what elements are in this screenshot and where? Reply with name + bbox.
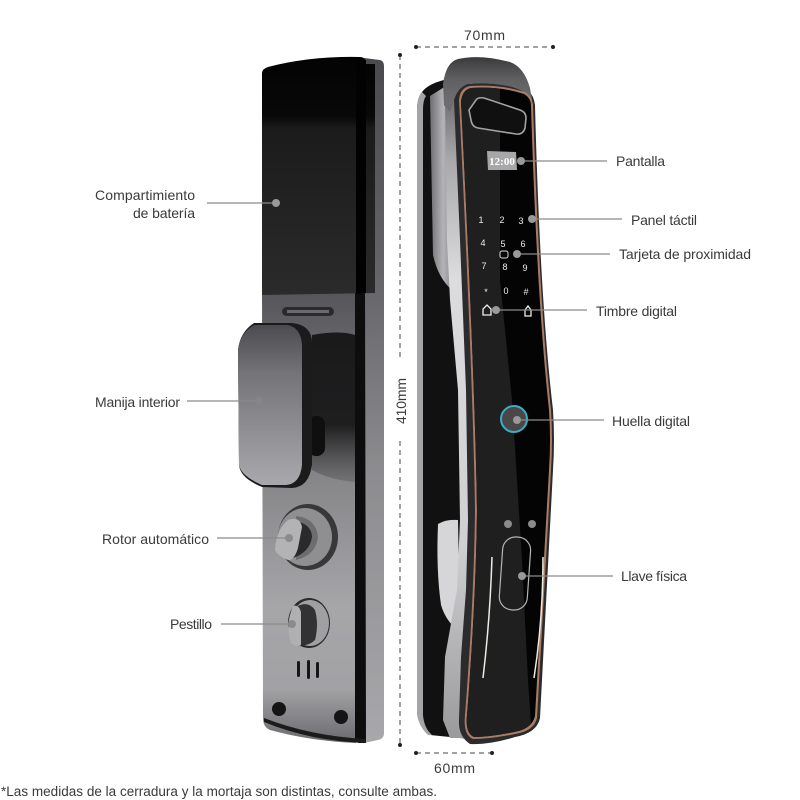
rear silver edge bbox=[417, 92, 432, 735]
callout: Timbre digital: Timbre digital bbox=[596, 303, 677, 319]
keypad: 4 bbox=[480, 238, 486, 248]
upper grey bulge bbox=[430, 86, 452, 290]
metal plate bbox=[262, 290, 356, 743]
dark centre strip bbox=[355, 290, 366, 743]
screen 12:00 bbox=[487, 151, 517, 170]
screws bbox=[272, 702, 348, 724]
callout: Compartimiento de batería: Compartimiento bbox=[95, 187, 195, 203]
callout: Rotor automático: Rotor automático bbox=[102, 531, 209, 547]
speaker slots bbox=[297, 660, 319, 679]
handle shadow bbox=[312, 332, 355, 482]
bell icons bbox=[483, 305, 531, 316]
callout: Tarjeta de proximidad: Tarjeta de proximidad bbox=[619, 246, 751, 262]
dimension: 70mm: 70mm bbox=[464, 27, 505, 43]
callout: Pestillo bbox=[170, 616, 296, 632]
back panel lock bbox=[238, 57, 384, 743]
copper outline bbox=[459, 86, 552, 739]
callout: Compartimiento de batería bbox=[95, 187, 280, 221]
keypad: 8 bbox=[502, 262, 508, 272]
card icon bbox=[500, 251, 508, 258]
face reflection bbox=[461, 88, 531, 737]
keypad: 2 bbox=[499, 215, 505, 225]
key cover bbox=[498, 536, 531, 611]
keypad: 5 bbox=[500, 239, 506, 249]
lower grey bulge bbox=[437, 520, 460, 632]
callout: Timbre digital bbox=[492, 303, 677, 319]
callout: Pestillo: Pestillo bbox=[170, 616, 212, 632]
callout: Compartimiento de batería: de batería bbox=[133, 205, 195, 221]
handle stem bbox=[308, 416, 325, 456]
keypad: 7 bbox=[481, 261, 487, 271]
battery compartment bbox=[262, 57, 375, 295]
black face bbox=[461, 88, 550, 737]
keypad: 3 bbox=[518, 216, 524, 226]
top cap bbox=[443, 57, 532, 112]
callout: Pantalla bbox=[517, 153, 665, 169]
keypad: 9 bbox=[522, 263, 528, 273]
dark frame bbox=[454, 83, 554, 744]
callout: Manija interior bbox=[95, 394, 263, 410]
dimension: 410mm bbox=[393, 53, 409, 747]
keypad: 1 bbox=[478, 215, 484, 225]
front panel lock bbox=[417, 57, 554, 745]
silver band bbox=[443, 90, 480, 738]
automatic rotor knob bbox=[275, 504, 338, 570]
fingerprint sensor bbox=[501, 406, 527, 432]
keypad: 0 bbox=[503, 286, 509, 296]
callout: Pantalla: Pantalla bbox=[616, 153, 665, 169]
callout: Huella digital bbox=[513, 413, 690, 429]
dimension: 70mm bbox=[414, 27, 555, 49]
keypad: 6 bbox=[520, 239, 526, 249]
footnote: *Las medidas de la cerradura y la mortaja son distintas, consulte ambas. bbox=[1, 784, 437, 799]
indicator lights bbox=[504, 520, 536, 528]
callout: Huella digital: Huella digital bbox=[612, 413, 690, 429]
callout: Llave física: Llave física bbox=[621, 568, 687, 584]
gray side strip bbox=[364, 58, 384, 743]
keypad: * bbox=[484, 287, 488, 297]
dimension: 60mm bbox=[414, 751, 494, 776]
camera window bbox=[469, 98, 526, 134]
callout: Panel táctil bbox=[528, 212, 697, 228]
handle bbox=[238, 323, 312, 488]
plate bottom edge bbox=[264, 718, 366, 743]
light strips bbox=[483, 557, 543, 678]
callout: Rotor automático bbox=[102, 531, 293, 547]
callout: Llave física bbox=[518, 568, 687, 584]
callout: Panel táctil: Panel táctil bbox=[631, 212, 697, 228]
latch knob bbox=[288, 598, 330, 648]
callout: Manija interior: Manija interior bbox=[95, 394, 180, 410]
keypad: # bbox=[523, 287, 529, 297]
screen 12:00: 12:00 bbox=[489, 156, 515, 168]
dimension: 60mm: 60mm bbox=[434, 760, 475, 776]
rear body bbox=[417, 80, 470, 739]
sensor slot bbox=[282, 307, 334, 316]
callout: Tarjeta de proximidad bbox=[513, 246, 751, 262]
dimension: 410mm: 410mm bbox=[393, 378, 409, 424]
keypad bbox=[478, 215, 529, 297]
